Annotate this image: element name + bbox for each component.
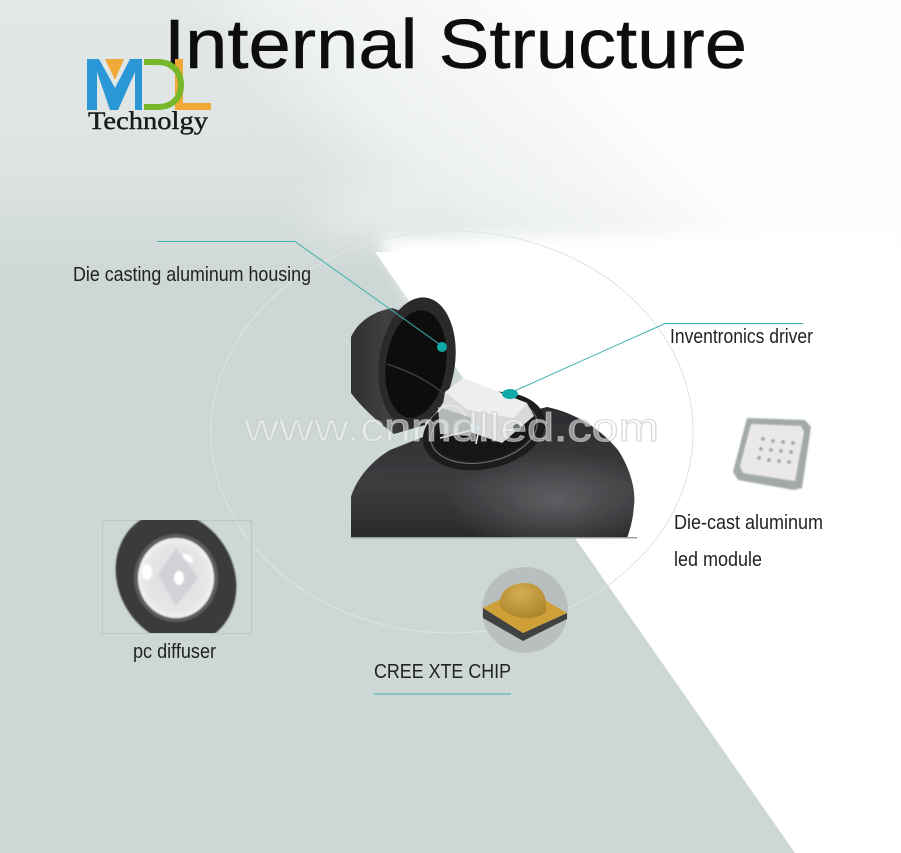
label: pc diffuser: pc diffuser bbox=[133, 641, 216, 663]
label: CREE chip bbox=[374, 661, 511, 694]
lamp: internal structure photo bbox=[351, 292, 637, 538]
title: Internal Structure bbox=[164, 5, 747, 83]
label: driver: Inventronics driver bbox=[670, 326, 813, 348]
label: CREE chip: CREE XTE CHIP bbox=[374, 661, 511, 683]
icon: pc diffuser bbox=[102, 520, 252, 634]
lid rim and inside bbox=[370, 292, 464, 432]
leader: housing bbox=[157, 242, 447, 352]
icon: CREE chip bbox=[482, 567, 568, 653]
label: led module: led module bbox=[674, 549, 762, 571]
leader: driver bbox=[502, 324, 803, 399]
icon: led module bbox=[733, 418, 811, 490]
label: led module: Die-cast aluminum bbox=[674, 512, 823, 534]
lid cup bbox=[351, 308, 430, 434]
orbit ring bbox=[211, 231, 693, 633]
label: housing: Die casting aluminum housing bbox=[73, 264, 311, 286]
mount ring bbox=[415, 381, 553, 481]
lamp dome bbox=[351, 407, 634, 538]
logo: MDL Technolgy: Technolgy bbox=[88, 108, 209, 135]
driver box bbox=[442, 378, 534, 443]
lamp base edge bbox=[351, 537, 637, 538]
watermark: www.cnmdlled.com bbox=[243, 406, 659, 450]
logo: MDL Technolgy bbox=[87, 59, 211, 135]
label: led module bbox=[674, 512, 823, 571]
